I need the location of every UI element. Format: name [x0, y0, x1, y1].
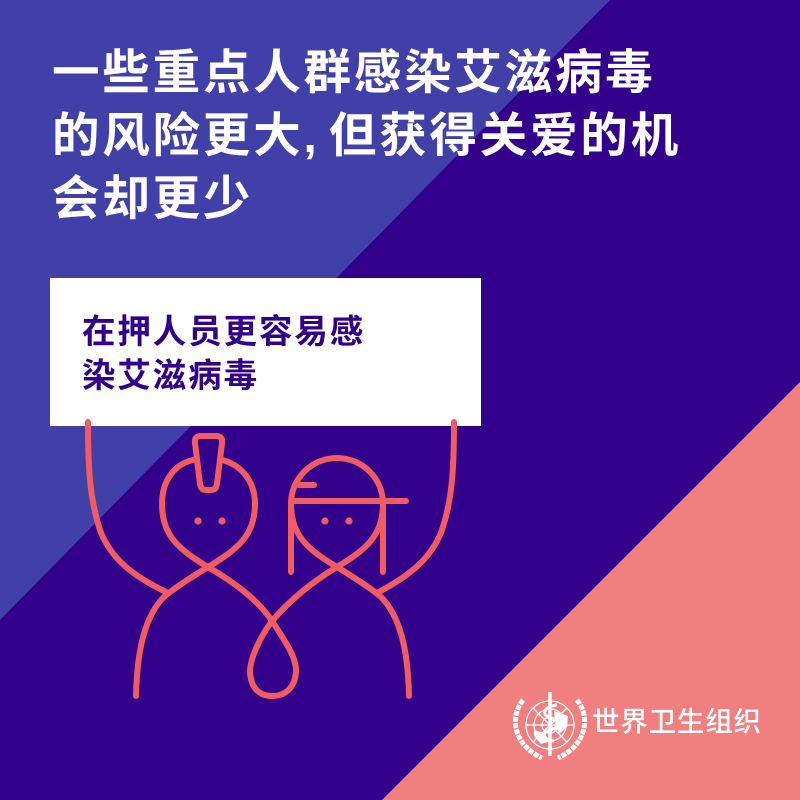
left person head and body line	[136, 460, 255, 696]
title: 的风险更大, 但获得关爱的机	[52, 110, 681, 163]
laurel wreath	[515, 700, 585, 758]
left person eyes	[194, 517, 226, 525]
right person eyes	[321, 517, 353, 525]
right person hair and headband	[291, 485, 406, 572]
title: 会却更少	[52, 173, 253, 226]
sign text: 染艾滋病毒	[82, 358, 259, 395]
title	[52, 47, 681, 226]
sign panel	[50, 278, 481, 426]
sign text	[82, 314, 365, 395]
right arm	[377, 422, 454, 593]
sign text: 在押人员更容易感	[82, 314, 365, 351]
body line joining both people	[162, 458, 409, 696]
organisation name: 世界卫生组织	[592, 706, 762, 737]
left arm	[88, 422, 168, 593]
rod and serpent	[544, 692, 558, 756]
globe	[526, 701, 574, 749]
title: 一些重点人群感染艾滋病毒	[52, 47, 656, 100]
WHO emblem	[512, 692, 588, 760]
mohawk	[195, 436, 222, 490]
land masses	[534, 711, 568, 744]
